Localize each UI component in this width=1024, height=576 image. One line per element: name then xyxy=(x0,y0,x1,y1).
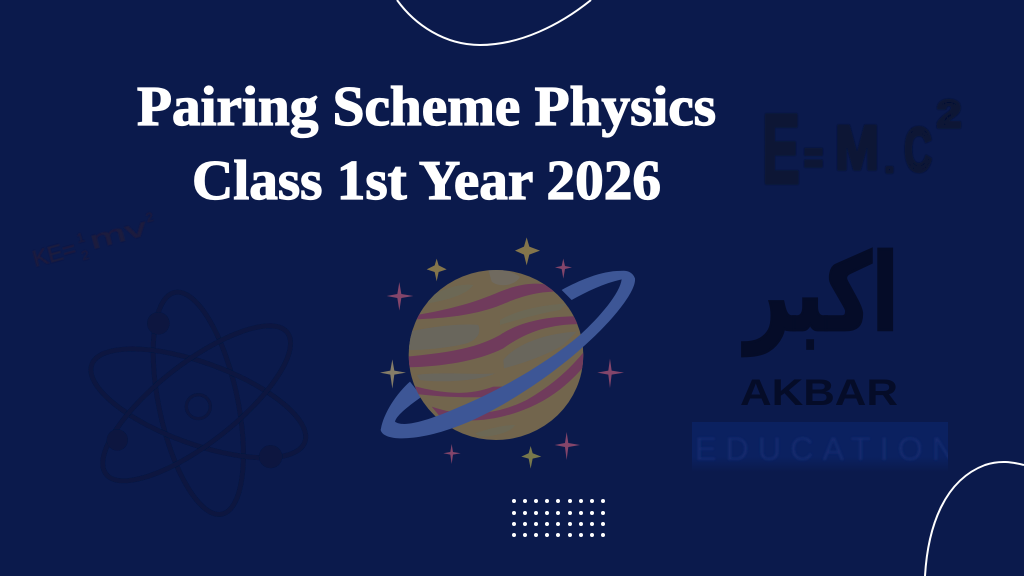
formula: E=mc squared: 2 xyxy=(937,94,961,136)
formula: E=mc squared: . xyxy=(885,146,894,179)
title line 2: Class 1st Year 2026 xyxy=(192,150,661,212)
top white curve xyxy=(397,0,591,45)
formula: E=mc squared: C xyxy=(904,116,932,185)
formula: kinetic energy xyxy=(28,209,160,276)
formula: E=mc squared: = xyxy=(804,133,823,182)
icon: atom xyxy=(78,284,319,522)
formula: E=mc squared: M xyxy=(835,114,879,183)
planet body xyxy=(407,268,587,442)
formula: kinetic energy: 1 xyxy=(75,230,86,246)
formula: kinetic energy: mv xyxy=(86,211,150,255)
logo: Akbar Education xyxy=(692,247,948,466)
logo wordmark: AKBAR xyxy=(740,372,898,413)
formula: kinetic energy: 2 xyxy=(80,247,91,263)
ring back xyxy=(381,271,623,430)
formula: kinetic energy: KE= xyxy=(30,235,79,272)
formula: kinetic energy: 2 xyxy=(144,209,155,225)
title line 1: Pairing Scheme Physics xyxy=(137,76,716,138)
dot grid xyxy=(512,499,605,537)
logo band text: EDUCATION xyxy=(695,431,955,467)
bottom right white curve xyxy=(925,462,1024,576)
formula: E=mc squared xyxy=(762,94,961,204)
title xyxy=(137,76,716,212)
logo Arabic mark: اکبر xyxy=(742,232,899,356)
icon: ringed planet with stars xyxy=(380,237,635,469)
ring front xyxy=(381,271,635,438)
formula: E=mc squared: E xyxy=(762,94,800,204)
logo band xyxy=(692,422,948,472)
stars xyxy=(387,259,624,464)
